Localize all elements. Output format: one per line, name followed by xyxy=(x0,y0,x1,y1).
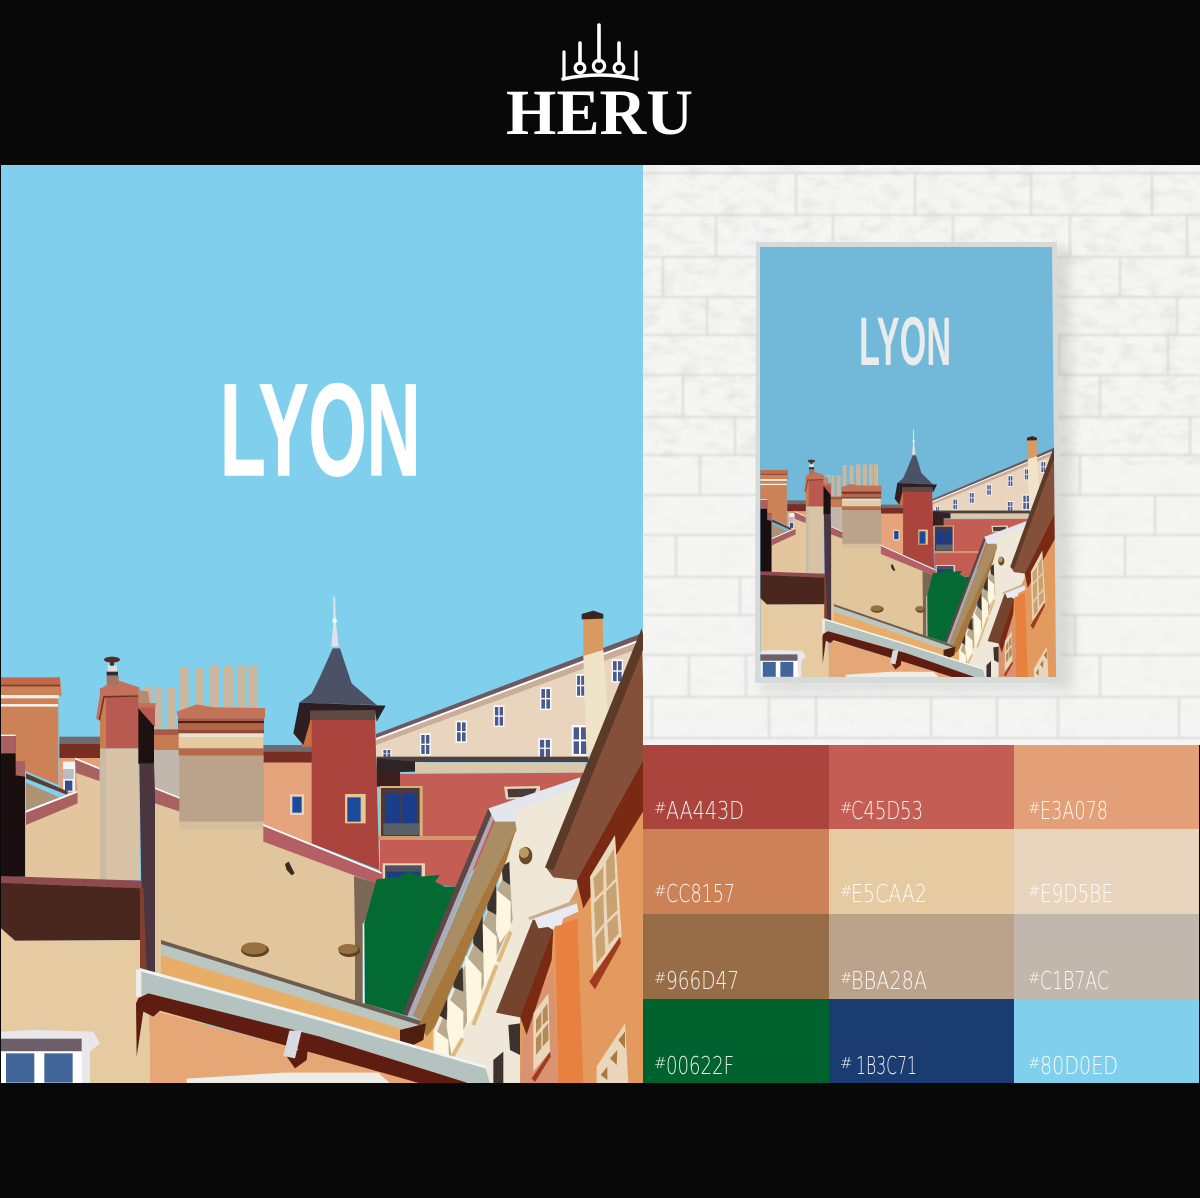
logo wordmark: HERU xyxy=(506,77,693,149)
lower roof xyxy=(520,928,553,1035)
swatch: 966D47: 966D47 xyxy=(666,966,739,995)
orange building front xyxy=(496,628,645,1083)
swatch: C45D53: C45D53 xyxy=(851,796,923,825)
far chimney right xyxy=(582,611,608,758)
swatch: CC8157: # xyxy=(654,882,667,900)
swatch: E9D5BE: # xyxy=(1028,882,1041,900)
top black band xyxy=(0,0,1200,165)
swatch: BBA28A: # xyxy=(840,969,853,987)
swatch: C45D53 xyxy=(829,745,1014,829)
swatch: 00622F xyxy=(643,999,829,1083)
swatch: 80D0ED: # xyxy=(1028,1054,1041,1072)
swatch: E9D5BE: E9D5BE xyxy=(1040,879,1113,908)
swatch: AA443D: AA443D xyxy=(666,796,744,825)
swatch: 80D0ED xyxy=(1014,999,1199,1083)
swatch: CC8157 xyxy=(643,829,829,914)
framed poster title: LYON xyxy=(859,303,951,380)
swatch: 1B3C71 xyxy=(829,999,1014,1083)
right rooftops xyxy=(263,597,645,1083)
wall stones xyxy=(241,862,295,957)
poster sky xyxy=(1,165,643,1083)
left lower window xyxy=(0,1030,100,1083)
panel: main Lyon poster xyxy=(0,165,645,1083)
swatch: C1B7AC: # xyxy=(1028,969,1041,987)
swatch: E3A078: # xyxy=(1028,799,1041,817)
swatch: 1B3C71: # xyxy=(840,1054,853,1072)
framed poster sky xyxy=(760,247,1060,677)
upper roof band xyxy=(161,940,433,1055)
panel: colour palette xyxy=(643,745,1199,1083)
swatch: 00622F: # xyxy=(654,1054,667,1072)
illustration: Lyon rooftops xyxy=(0,597,645,1083)
icon: crown xyxy=(563,25,637,79)
swatch: 00622F: 00622F xyxy=(666,1051,734,1080)
lattice windows xyxy=(532,835,628,1083)
poster frame xyxy=(755,242,1061,683)
swatch: 80D0ED: 80D0ED xyxy=(1040,1051,1118,1080)
central chimney xyxy=(177,704,265,756)
swatch: E3A078: E3A078 xyxy=(1040,796,1108,825)
swatch: E3A078 xyxy=(1014,745,1199,829)
green tree xyxy=(364,872,457,1016)
poster title: LYON xyxy=(220,356,421,503)
red wall window xyxy=(380,786,423,837)
stepped cream building xyxy=(400,777,581,1083)
swatch: E5CAA2 xyxy=(829,829,1014,914)
panel: framed poster on brick wall xyxy=(643,165,1200,745)
left rooftops xyxy=(0,657,433,1083)
swatch: BBA28A: BBA28A xyxy=(851,966,927,995)
swatch: E5CAA2: # xyxy=(840,882,853,900)
swatch: 966D47: # xyxy=(654,969,667,987)
swatch: E5CAA2: E5CAA2 xyxy=(851,879,927,908)
brick wall xyxy=(643,165,1200,745)
swatch: C45D53: # xyxy=(840,799,853,817)
swatch: AA443D: # xyxy=(654,799,667,817)
big roof xyxy=(577,757,645,908)
turret xyxy=(293,597,386,870)
frame shadow xyxy=(760,250,1073,692)
swatch: AA443D xyxy=(643,745,829,829)
swatch: 966D47 xyxy=(643,914,829,999)
framed poster illustration xyxy=(760,429,1056,677)
swatch: E9D5BE xyxy=(1014,829,1199,914)
swatch: C1B7AC: C1B7AC xyxy=(1040,966,1109,995)
swatch: CC8157: CC8157 xyxy=(666,879,735,908)
framed poster art xyxy=(760,247,1060,677)
tall chimney xyxy=(96,657,140,880)
upper cream building xyxy=(376,633,643,763)
logo: Heru xyxy=(506,25,693,149)
swatch: C1B7AC xyxy=(1014,914,1199,999)
front roof band xyxy=(136,968,490,1083)
bottom black band xyxy=(0,1083,1200,1198)
swatch: 1B3C71: 1B3C71 xyxy=(856,1051,917,1080)
swatch: BBA28A xyxy=(829,914,1014,999)
